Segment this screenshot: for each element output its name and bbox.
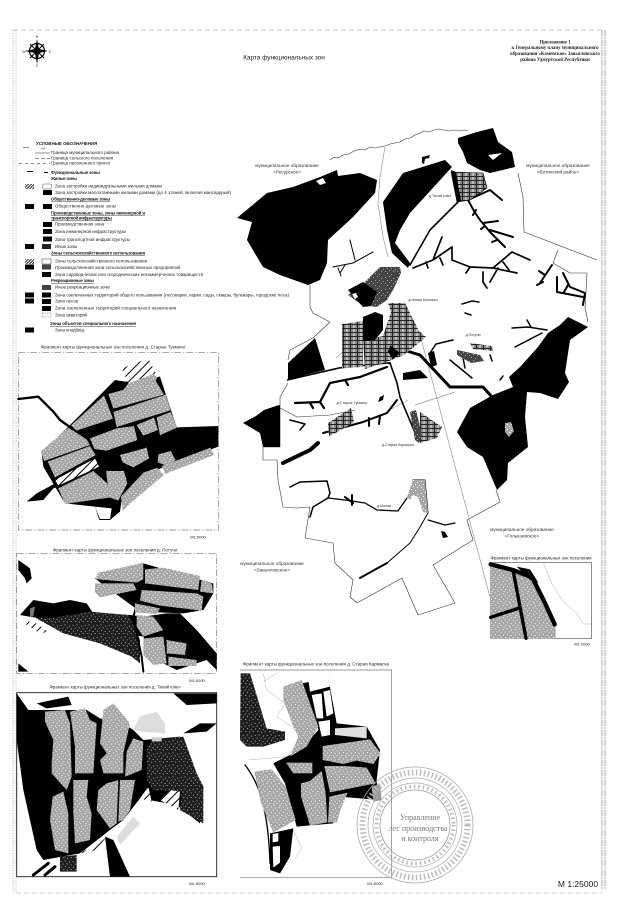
stamp text: Управление: [400, 813, 441, 822]
inset 3 base zones: [17, 693, 217, 877]
map: place labels: муниципальное образование: [526, 163, 590, 168]
inset map: Staraya Karmaska: Фрагмент карты функциональных зон поселения д. Старая Кармаска: [243, 662, 390, 666]
map: place labels: «Завьяловское»: [254, 568, 290, 572]
settlement: central village: [342, 267, 426, 369]
legend: entries: Зоны сельскохозяйственного использования: [55, 258, 148, 264]
legend: entries: Зона застройки малоэтажными жилыми домами (до 4 этажей, включая мансардный): [55, 190, 232, 195]
legend: entries: Жилые зоны: [50, 176, 77, 181]
appendix note: образования «Каменское» Завьяловского: [510, 52, 600, 57]
inset map: settlement fragment: [490, 556, 592, 646]
inset 1 tail: [27, 482, 58, 502]
map: place labels: д.Старая Кармаска: [382, 443, 414, 447]
legend: entries: Граница сельского поселения: [51, 156, 114, 160]
map: place labels: д.Тихий ключ: [429, 194, 451, 198]
legend: entries: Граница населенного пункта: [51, 160, 111, 166]
legend: entries: Иные рекреационные зоны: [55, 284, 110, 290]
map: place labels: д.Новая Монорка: [408, 298, 438, 302]
legend: boundary line samples: [19, 148, 50, 172]
legend: entries: [50, 150, 290, 332]
map: place labels: муниципальное образование: [240, 561, 304, 566]
inset 1 road: [18, 397, 72, 428]
round stamp: и контроля: [401, 834, 439, 843]
inset 1 blocks: [41, 358, 214, 519]
inset 3 frame: [17, 693, 217, 877]
legend: entries: Зона застройки индивидуальными жилыми домами: [55, 184, 163, 188]
legend: [19, 141, 290, 332]
legend: entries: Зона кладбищ: [55, 328, 84, 332]
map: place labels: «Голышевское»: [505, 534, 540, 538]
inset 2 road: [133, 568, 143, 672]
inset map: Starye Tukmachi: Фрагмент карты функциональных зон поселения д. Старые Тукмачи: [41, 344, 186, 350]
legend: entries: Граница муниципального района: [51, 150, 120, 155]
inset map: Potuchi: [17, 548, 217, 683]
inset map: Staraya Karmaska: [240, 662, 392, 886]
map: place labels: муниципальное образование: [490, 527, 554, 532]
appendix note: к Генеральному плану муниципального: [512, 46, 599, 51]
settlement: Tikhii Klyuch: [451, 172, 487, 202]
inset 4 base zones: [240, 673, 380, 873]
map: place labels: [240, 163, 590, 572]
inset map: settlement fragment: Фрагмент карты функциональных зон поселения: [490, 556, 592, 560]
legend: entries: Общественно-деловые зоны: [51, 196, 110, 202]
map: place labels: муниципальное образование: [255, 163, 319, 168]
round stamp: [357, 767, 473, 883]
icon: compass rose: S: [36, 64, 39, 68]
appendix note: Приложение 1: [540, 40, 571, 46]
icon: compass rose: W: [22, 50, 26, 54]
inset map: Potuchi: Фрагмент карты функциональных зон поселения д. Потучи: [53, 548, 178, 552]
icon: compass rose: N: [36, 35, 39, 39]
inset map: Starye Tukmachi: М1:5000: [190, 534, 207, 540]
legend: entries: транспортной инфраструктуры: [51, 216, 112, 220]
inset 4 frame: [240, 670, 392, 877]
legend: entries: Зона акваторий: [55, 312, 88, 318]
legend: entries: Зоны объектов специального назначения: [50, 321, 136, 326]
inset map: Staraya Karmaska: М1:5000: [367, 881, 384, 886]
inset 2 blocks: [22, 563, 213, 666]
map: large forest zones: [237, 128, 588, 538]
map scale: М 1:25000: [558, 879, 598, 889]
settlement: Potuchi: [457, 350, 484, 363]
inset 1 base zones: [42, 377, 218, 520]
legend: entries: Производственная зона: [55, 222, 105, 226]
map: settlements: [328, 170, 493, 513]
legend: right swatches: [42, 184, 52, 317]
map: main roads: [288, 202, 492, 563]
legend: entries: Производственные зоны, зоны инженерной и: [51, 210, 145, 216]
inset map: settlement fragment: М1:2000: [574, 642, 591, 646]
main district map: [237, 128, 597, 615]
icon: compass rose: E: [49, 50, 52, 54]
inset map: Tikhii Klyuch: Фрагмент карты функциональных зон поселения д. Тихий ключ: [50, 684, 180, 690]
map: boundaries: [263, 129, 597, 615]
icon: compass rose: [22, 35, 52, 68]
legend: УСЛОВНЫЕ ОБОЗНАЧЕНИЯ: [36, 141, 97, 146]
legend: entries: Общественно-деловые зоны: [55, 204, 116, 208]
appendix note: [510, 40, 600, 63]
map: rivers and ravines: [283, 190, 585, 578]
legend: entries: Зона лесов: [55, 298, 79, 304]
inset 5 frame: [491, 563, 592, 638]
map: place labels: д.Малая: [377, 504, 391, 508]
inset map: Tikhii Klyuch: [17, 684, 217, 886]
map: place labels: «Ресурское»: [273, 170, 301, 174]
inset map: Starye Tukmachi: [18, 344, 218, 540]
map: place labels: «Вотинский район»: [537, 168, 579, 174]
appendix note: района Удмуртской Республики: [520, 58, 590, 63]
inset 3 blocks: [45, 703, 180, 853]
legend: left swatches: [25, 184, 34, 332]
inset 5 boundary: [543, 563, 592, 624]
inset map: Potuchi: М1:5000: [189, 678, 206, 683]
legend: entries: Зона озелененных территорий общего пользования (лесопарки, парки, сады, скверы, бульвары, городские леса): [55, 292, 290, 298]
title: Карта функциональных зон: [243, 54, 325, 62]
inset map: Tikhii Klyuch: М1:5000: [189, 881, 206, 886]
inset 1 frame: [18, 352, 218, 530]
map: place labels: д.Потучи: [466, 333, 480, 337]
legend: entries: Зона инженерной инфраструктуры: [55, 229, 126, 234]
legend: entries: Зона садоводческих или огороднических некоммерческих товариществ: [55, 272, 204, 277]
legend: entries: Функциональные зоны: [51, 170, 100, 175]
legend: entries: Зона озелененных территорий специального назначения: [55, 306, 177, 310]
settlement: Starye Tukmachi: [328, 408, 354, 436]
legend: entries: Производственная зона сельскохозяйственных предприятий: [55, 265, 181, 270]
legend: entries: Иные зоны: [55, 244, 77, 249]
legend: entries: Зоны сельскохозяйственного использования: [51, 250, 145, 256]
inset 5 black roads: [491, 564, 555, 638]
legend: entries: Зона транспортной инфраструктуры: [55, 237, 130, 242]
settlement: Stary Kermez: [420, 412, 442, 443]
round stamp: лес производства: [389, 824, 448, 833]
inset 4 blocks: [254, 678, 382, 868]
inset 5 zone fill: [491, 565, 556, 638]
inset 2 frame: [17, 553, 217, 673]
map: place labels: д.Старые Тукмачи: [337, 401, 367, 405]
inset 2 base zones: [18, 560, 217, 672]
legend: entries: Рекреационные зоны: [51, 278, 94, 283]
